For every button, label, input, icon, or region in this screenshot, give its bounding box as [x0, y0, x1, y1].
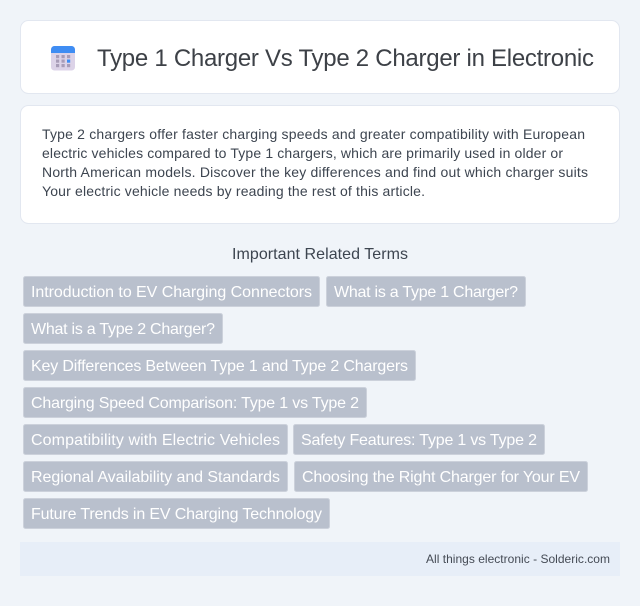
tag: key differences: Key Differences Between Type 1 and Type 2 Chargers — [31, 358, 408, 375]
tag: type 1: What is a Type 1 Charger? — [334, 284, 518, 301]
tag: compatibility: Compatibility with Electric Vehicles — [31, 432, 280, 449]
tag: future trends — [24, 498, 330, 528]
tag: safety — [294, 424, 544, 454]
tag: charging speed: Charging Speed Comparison: Type 1 vs Type 2 — [31, 395, 359, 412]
panel: header — [20, 20, 620, 94]
icon: calendar — [51, 46, 75, 70]
heading: related terms: Important Related Terms — [232, 246, 408, 263]
tag: regional — [24, 462, 288, 492]
tag: charging speed — [24, 388, 366, 418]
title: Type 1 Charger Vs Type 2 Charger in Electronic — [97, 45, 594, 72]
tag: introduction: Introduction to EV Charging Connectors — [31, 284, 312, 301]
tag: introduction — [24, 276, 320, 306]
tag: type 1 — [326, 276, 526, 306]
text block: intro paragraph — [42, 126, 588, 199]
tag: choosing: Choosing the Right Charger for Your EV — [302, 469, 580, 486]
tag: type 2: What is a Type 2 Charger? — [31, 321, 215, 338]
panel: intro text — [20, 106, 620, 224]
text block: intro paragraph: electric vehicles compared to Type 1 chargers, which are primarily used in older or — [42, 145, 563, 161]
text block: intro paragraph: Your electric vehicle needs by reading the rest of this article. — [42, 183, 425, 199]
tag: choosing — [294, 462, 588, 492]
tag: future trends: Future Trends in EV Charging Technology — [31, 506, 322, 523]
text block: intro paragraph: North American models. Discover the key differences and find out which charger suits — [42, 164, 588, 180]
text block: intro paragraph: Type 2 chargers offer faster charging speeds and greater compatibility with European — [42, 126, 585, 142]
tag: regional: Regional Availability and Standards — [31, 469, 280, 486]
tag: key differences — [24, 350, 416, 380]
footer credit: All things electronic - Solderic.com — [426, 552, 610, 566]
tag: type 2 — [24, 314, 222, 344]
tag: compatibility — [24, 424, 288, 454]
footer bar — [20, 542, 620, 576]
panel: related term tags — [24, 276, 588, 528]
tag: safety: Safety Features: Type 1 vs Type 2 — [301, 432, 537, 449]
